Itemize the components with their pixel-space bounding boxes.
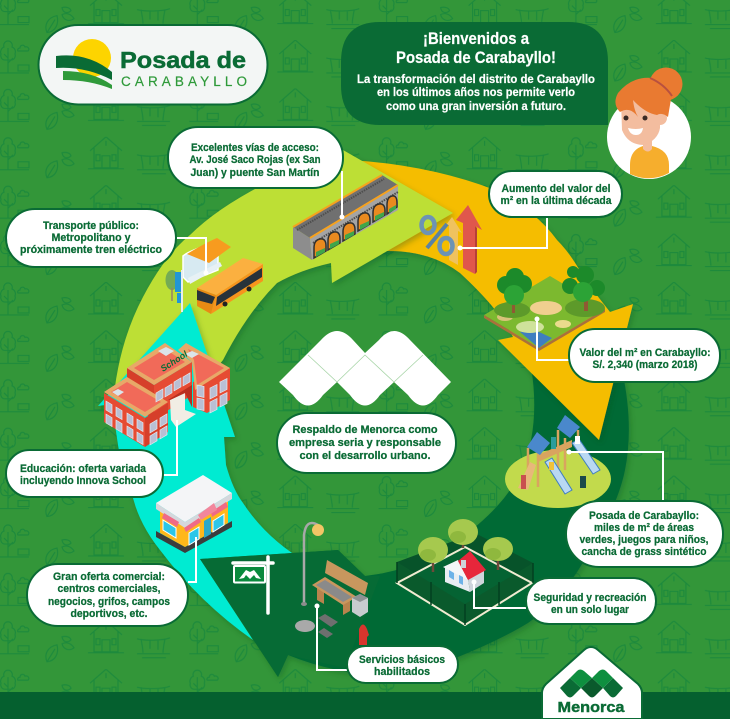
welcome panel xyxy=(341,22,608,125)
school entrance xyxy=(170,393,196,427)
illustration: fire hydrant xyxy=(359,624,369,645)
callout: vías de acceso: Av. José Saco Rojas (ex San xyxy=(190,154,321,166)
callout: educación xyxy=(6,450,163,497)
callout: oferta comercial: negocios, grifos, campos xyxy=(48,596,170,608)
illustration: school building xyxy=(104,343,230,447)
callout: oferta comercial: centros comerciales, xyxy=(58,583,160,595)
callout: vías de acceso: Juan) y puente San Martín xyxy=(190,167,320,179)
callout: valor del m²: Valor del m² en Carabayllo: xyxy=(580,347,710,359)
arrow: yellow segment xyxy=(350,160,633,440)
school rooftop units xyxy=(112,347,199,396)
illustration: park with trees and pond xyxy=(484,266,605,351)
illustration: bus stop xyxy=(166,238,231,312)
callout: Posada de Carabayllo xyxy=(566,501,723,567)
welcome panel: La transformación del distrito de Carabayllo xyxy=(357,72,595,86)
school sign: School xyxy=(159,349,190,374)
illustration: playground xyxy=(505,415,611,508)
illustration: street lamp xyxy=(301,523,324,606)
callout: transporte público xyxy=(6,209,176,267)
arrow: dark green segment xyxy=(200,350,629,677)
Menorca white logo xyxy=(279,331,451,406)
illustration: bench and bin xyxy=(312,560,368,617)
Menorca brand tag xyxy=(542,647,642,719)
callout: seguridad y recreación: Seguridad y recreación xyxy=(534,592,647,604)
illustration: manhole and drains xyxy=(295,614,338,638)
callout: servicios básicos: habilitados xyxy=(374,666,430,678)
callout: valor del m² xyxy=(569,329,720,382)
callout: vías de acceso xyxy=(168,127,343,188)
illustration: percent and rising arrows xyxy=(422,205,482,274)
welcome panel: Posada de Carabayllo! xyxy=(396,48,556,67)
connector lines xyxy=(163,171,663,670)
welcome panel: como una gran inversión a futuro. xyxy=(386,99,566,113)
callout: vías de acceso: Excelentes vías de acceso: xyxy=(191,142,319,154)
logo pill xyxy=(38,25,268,104)
logo pill: Posada de xyxy=(120,47,246,73)
callout: oferta comercial: Gran oferta comercial: xyxy=(53,571,165,583)
welcome panel: en los últimos años nos permite verlo xyxy=(377,85,575,99)
callout: transporte público: Transporte público: xyxy=(43,220,139,232)
arrow: aqua segment xyxy=(98,303,292,640)
callout: servicios básicos: Servicios básicos xyxy=(359,654,445,666)
callout: seguridad y recreación xyxy=(526,578,656,624)
callout: respaldo de Menorca xyxy=(277,413,456,473)
callout: respaldo de Menorca: con el desarrollo urbano. xyxy=(300,450,430,462)
callout: respaldo de Menorca: Respaldo de Menorca como xyxy=(292,424,438,436)
callout: transporte público: próximamente tren eléctrico xyxy=(20,244,162,256)
callout: Posada de Carabayllo: cancha de grass sintético xyxy=(582,546,707,558)
arrow head: dark green overlay xyxy=(200,550,380,677)
illustration: bridge xyxy=(293,175,398,260)
callout: valor del m²: S/. 2,340 (marzo 2018) xyxy=(592,359,698,371)
avatar: woman xyxy=(607,68,691,179)
callout: educación: incluyendo Innova School xyxy=(20,475,146,487)
callout: aumento del valor: Aumento del valor del xyxy=(502,183,610,195)
school right wing xyxy=(193,368,230,413)
callout: Posada de Carabayllo: miles de m² de áreas xyxy=(594,522,694,534)
Menorca icon xyxy=(560,670,623,698)
logo pill: CARABAYLLO xyxy=(121,74,247,89)
callout: Posada de Carabayllo: verdes, juegos para niños, xyxy=(580,534,708,546)
school windows xyxy=(106,373,227,445)
callout: servicios básicos xyxy=(347,646,458,683)
callout: oferta comercial xyxy=(27,564,188,626)
school left block xyxy=(104,393,145,447)
callout: educación: Educación: oferta variada xyxy=(20,463,147,475)
illustration: fenced house with trees xyxy=(397,519,533,625)
logo sun xyxy=(73,39,111,77)
callout: aumento del valor: m² en la última década xyxy=(500,195,612,207)
illustration: Menorca real-estate sign xyxy=(233,557,273,613)
arrow: lime segment xyxy=(112,150,453,420)
callout: aumento del valor xyxy=(489,171,622,217)
callout: transporte público: Metropolitano y xyxy=(52,232,131,244)
callout: seguridad y recreación: en un solo lugar xyxy=(551,604,630,616)
Menorca brand tag: Menorca xyxy=(558,700,626,716)
illustration: bus xyxy=(197,258,263,314)
callout: oferta comercial: deportivos, etc. xyxy=(70,608,148,620)
callout: Posada de Carabayllo: Posada de Carabayllo: xyxy=(589,510,699,522)
callout: respaldo de Menorca: empresa seria y responsable xyxy=(289,437,441,449)
school centre block xyxy=(127,368,154,420)
welcome panel: ¡Bienvenidos a xyxy=(423,29,529,48)
footer band xyxy=(0,692,730,719)
illustration: shop xyxy=(156,475,232,553)
